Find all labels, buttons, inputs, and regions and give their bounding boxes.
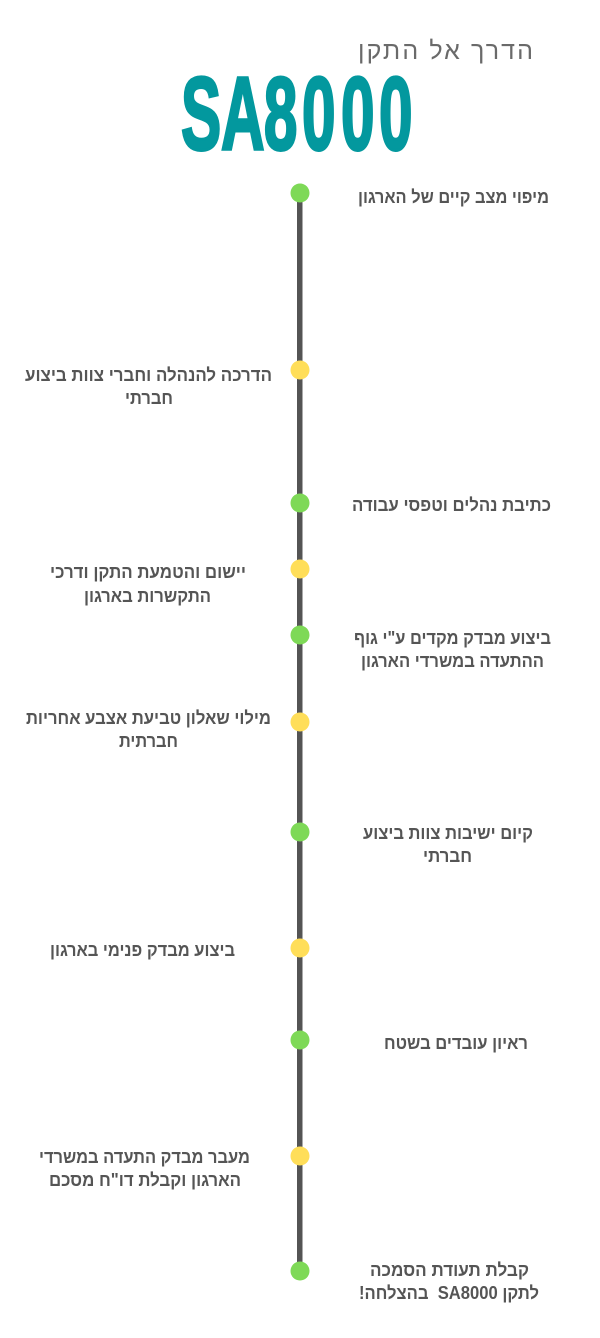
step 11 text — [359, 1260, 539, 1303]
step 7 text: חברתי — [423, 846, 472, 866]
dot: step 11 — [290, 1262, 310, 1280]
dot: step 7 — [290, 822, 310, 842]
step 5 text: ההתעדה במשרדי הארגון — [361, 651, 544, 671]
step 4 text: התקשרות בארגון — [84, 586, 211, 606]
step 4 text — [50, 562, 246, 606]
step 6 text: חברתית — [119, 731, 178, 751]
step 4 text: יישום והטמעת התקן ודרכי — [50, 562, 246, 582]
step 10 text — [39, 1147, 250, 1190]
dot: step 3 — [290, 494, 310, 512]
step 1 text: מיפוי מצב קיים של הארגון — [358, 187, 549, 207]
dot: step 9 — [290, 1030, 310, 1050]
step 11 text: לתקן SA8000 בהצלחה! — [359, 1283, 539, 1303]
dot: step 4 — [290, 560, 310, 578]
step 6 text — [26, 708, 271, 751]
dot: step 5 — [290, 626, 310, 644]
step 5 text: ביצוע מבדק מקדים ע"י גוף — [354, 628, 551, 648]
step 2 text: חברתי — [125, 388, 173, 408]
timeline dots — [290, 184, 310, 1280]
dot: step 10 — [290, 1146, 310, 1166]
dot: step 6 — [290, 712, 310, 732]
step 8 text: ביצוע מבדק פנימי בארגון — [50, 940, 235, 960]
step 11 text: קבלת תעודת הסמכה — [370, 1260, 529, 1280]
timeline axis — [297, 193, 302, 1271]
step 5 text — [354, 628, 551, 671]
dot: step 8 — [290, 938, 310, 958]
step 7 text: קיום ישיבות צוות ביצוע — [363, 823, 533, 843]
step 6 text: מילוי שאלון טביעת אצבע אחריות — [26, 708, 271, 728]
dot: step 2 — [290, 360, 310, 380]
subtitle: הדרך אל התקן — [358, 37, 533, 65]
dot: step 1 — [290, 184, 310, 202]
title: SA8000: SA8000 — [181, 57, 413, 173]
step 7 text — [363, 823, 533, 866]
step 3 text: כתיבת נהלים וטפסי עבודה — [352, 495, 551, 515]
step 2 text — [25, 365, 272, 408]
step 9 text: ראיון עובדים בשטח — [384, 1033, 528, 1053]
step 2 text: הדרכה להנהלה וחברי צוות ביצוע — [25, 365, 272, 385]
step 10 text: הארגון וקבלת דו"ח מסכם — [49, 1170, 241, 1190]
step 10 text: מעבר מבדק התעדה במשרדי — [39, 1147, 250, 1167]
